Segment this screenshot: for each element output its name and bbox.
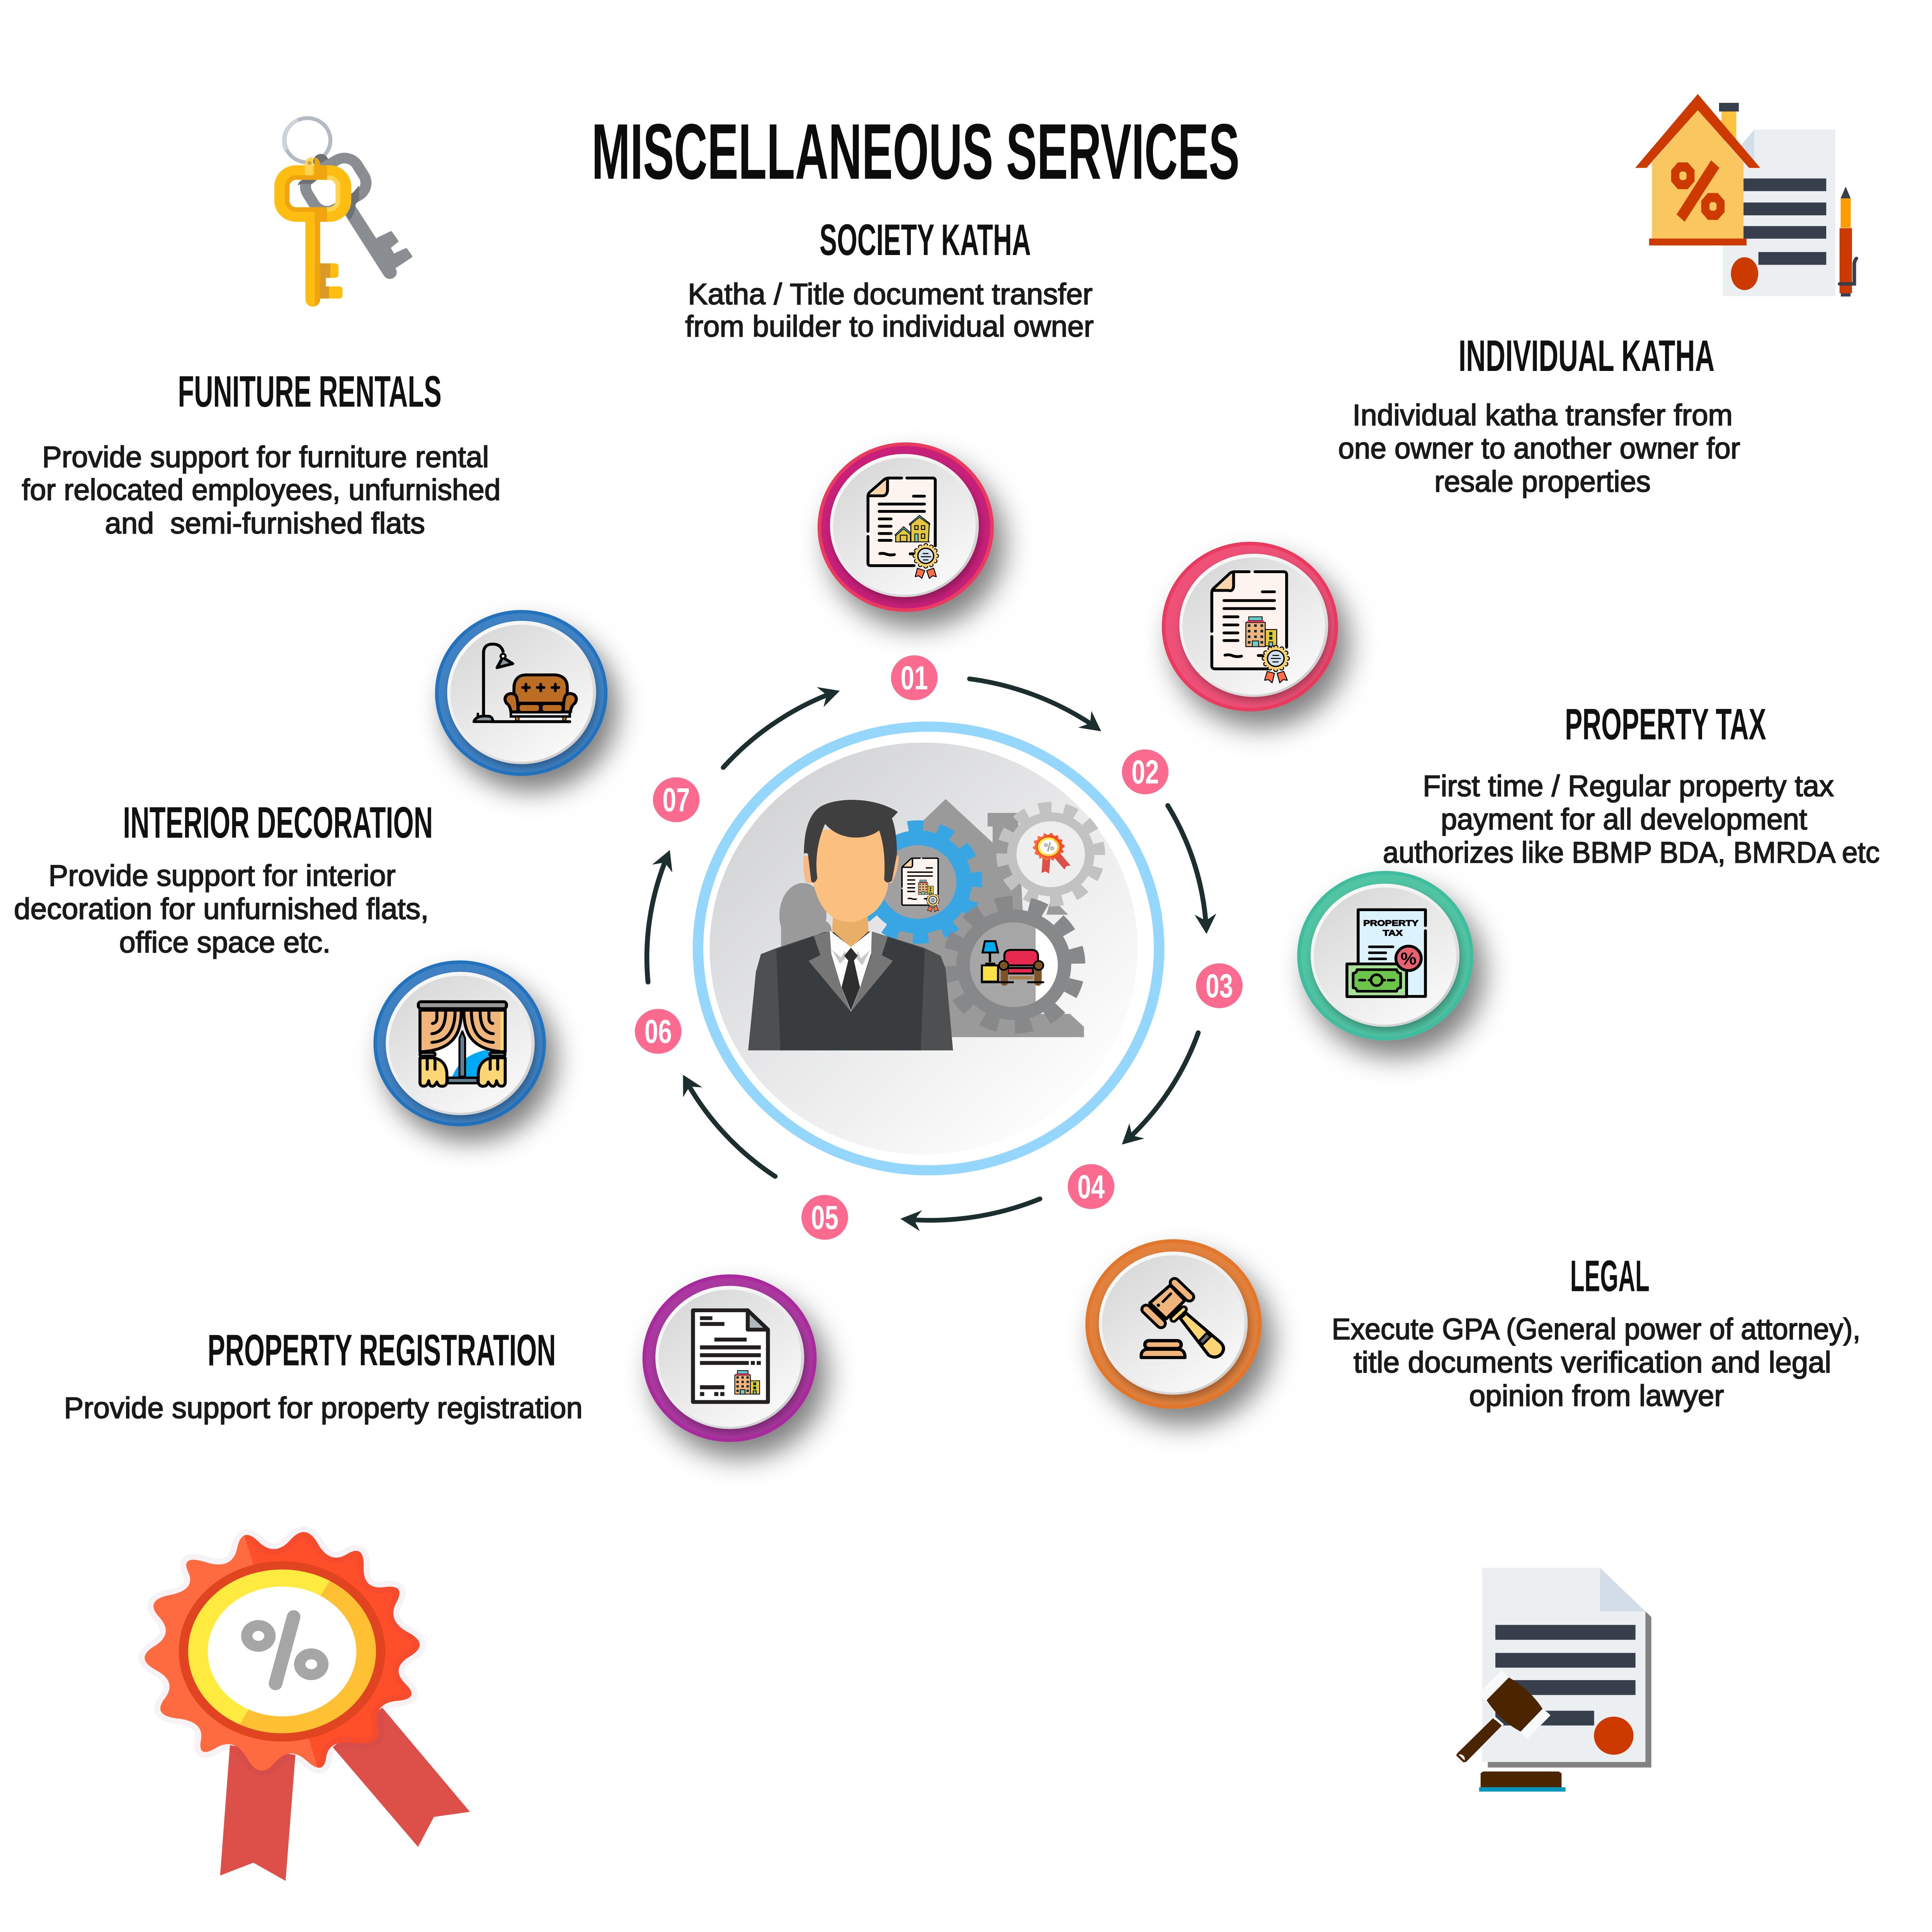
text block: society katha: from builder to individual owner <box>685 310 1094 343</box>
text block: property registration: PROPERTY REGISTRATION <box>207 1325 556 1375</box>
arrow 07 to 01 <box>723 681 843 767</box>
arrow 05 to 06 <box>673 1070 775 1177</box>
arrow 06 to 07 <box>647 846 680 982</box>
icon button: property tax bill: TAX <box>1383 928 1403 938</box>
badge 02 <box>1122 750 1168 794</box>
arrow 04 to 05 <box>899 1199 1040 1231</box>
icon: percent rosette ribbon <box>145 1532 470 1881</box>
text block: interior decoration: decoration for unfurnished flats, <box>14 892 429 925</box>
text block: individual katha: resale properties <box>1434 465 1651 498</box>
text block: furniture rentals: FUNITURE RENTALS <box>178 367 442 416</box>
icon: document with gavel <box>1456 1568 1651 1792</box>
icon button: interior decoration curtains <box>374 960 546 1126</box>
icon: keys <box>282 118 411 307</box>
arrow 03 to 04 <box>1114 1033 1198 1152</box>
text block: individual katha: one owner to another owner for <box>1338 432 1740 465</box>
icon button: property tax bill: PROPERTY <box>1363 918 1418 928</box>
text block: interior decoration <box>14 798 433 959</box>
icon button: property tax bill <box>1297 871 1473 1041</box>
badge 06 <box>635 1009 682 1054</box>
icon button: property tax bill: % <box>1401 949 1417 968</box>
text block: furniture rentals <box>22 367 501 540</box>
text block: furniture rentals: and semi-furnished flats <box>105 507 425 540</box>
text block: legal: Execute GPA (General power of attorney), <box>1332 1312 1861 1346</box>
badge 07 <box>653 777 699 822</box>
badge 05: 05 <box>811 1199 838 1236</box>
text block: interior decoration: Provide support for interior <box>49 859 396 892</box>
badge 03: 03 <box>1206 967 1233 1005</box>
text block: legal: opinion from lawyer <box>1469 1379 1724 1412</box>
badge 04: 04 <box>1077 1168 1105 1205</box>
text block: property registration: Provide support for property registration <box>64 1391 583 1425</box>
badge 02: 02 <box>1131 753 1159 791</box>
icon button: society katha document <box>818 442 994 612</box>
text block: furniture rentals: for relocated employees, unfurnished <box>22 473 501 507</box>
central illustration <box>698 727 1159 1170</box>
text block: society katha <box>685 215 1094 343</box>
text block: property tax: payment for all development <box>1441 803 1807 836</box>
icon button: property registration document <box>643 1274 816 1442</box>
icon button: individual katha document <box>1162 542 1338 711</box>
icon: house with percent and document <box>1635 94 1856 296</box>
text block: property tax: PROPERTY TAX <box>1565 699 1766 749</box>
text block: society katha: Katha / Title document transfer <box>688 277 1093 311</box>
text block: interior decoration: INTERIOR DECORATION <box>123 798 433 847</box>
text block: individual katha: INDIVIDUAL KATHA <box>1459 331 1714 380</box>
text block: property registration <box>64 1325 583 1425</box>
arrow 02 to 03 <box>1168 806 1218 935</box>
icon button: legal gavel <box>1085 1239 1262 1409</box>
text block: interior decoration: office space etc. <box>119 925 331 959</box>
text block: individual katha: Individual katha transfer from <box>1352 398 1733 432</box>
text block: property tax <box>1383 699 1880 869</box>
arrow 01 to 02 <box>969 679 1108 740</box>
title: MISCELLANEOUS SERVICES <box>592 108 1240 196</box>
badge 01 <box>891 655 938 700</box>
icon button: furniture rentals sofa and lamp <box>435 610 607 776</box>
text block: individual katha <box>1338 331 1740 498</box>
badge 01: 01 <box>901 659 928 697</box>
text block: legal <box>1332 1251 1861 1412</box>
badge 05 <box>801 1195 848 1240</box>
text block: legal: LEGAL <box>1570 1251 1650 1301</box>
text block: furniture rentals: Provide support for furniture rental <box>42 440 489 474</box>
badge 03 <box>1196 963 1243 1008</box>
badge 06: 06 <box>645 1013 672 1050</box>
badge 04 <box>1068 1164 1114 1209</box>
text block: legal: title documents verification and legal <box>1354 1346 1831 1379</box>
badge 07: 07 <box>663 781 690 818</box>
text block: property tax: authorizes like BBMP BDA, BMRDA etc <box>1383 836 1880 869</box>
text block: society katha: SOCIETY KATHA <box>820 215 1031 265</box>
text block: property tax: First time / Regular property tax <box>1423 769 1834 803</box>
